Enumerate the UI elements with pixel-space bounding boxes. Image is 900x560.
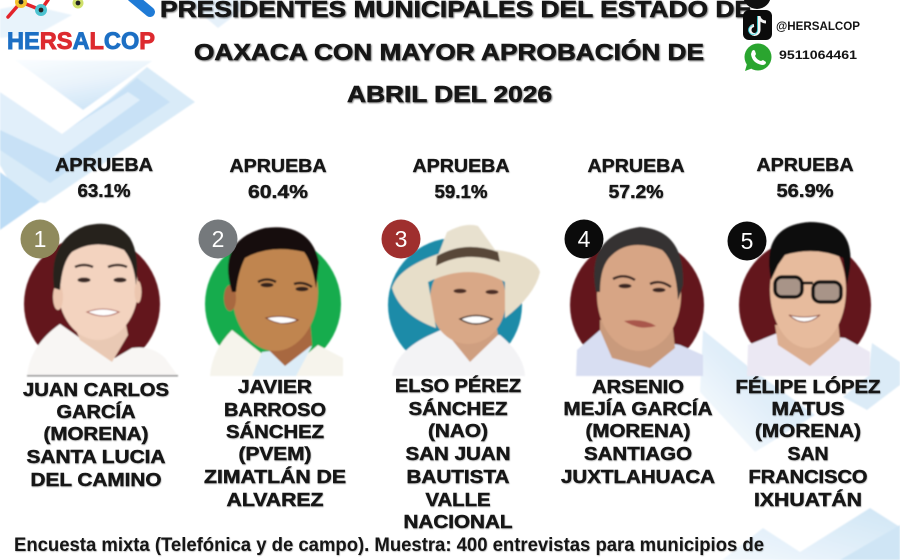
name 2: ZIMATLÁN DE [204, 466, 346, 487]
rank badge 3: 3 [395, 226, 407, 252]
rank badge 2 [198, 220, 238, 258]
name 5: (MORENA) [755, 421, 861, 441]
name 2 [204, 377, 346, 510]
approval 2: 60.4% [248, 182, 308, 202]
name 4: ARSENIO [592, 377, 684, 397]
name 2: BARROSO [224, 400, 326, 420]
name 1: DEL CAMINO [30, 470, 162, 490]
social contacts [743, 0, 860, 71]
name 2: (PVEM) [238, 444, 312, 464]
portrait 2 [205, 227, 343, 376]
portrait 4 [570, 227, 704, 376]
approval 3: APRUEBA [412, 156, 510, 176]
rank badge 4: 4 [578, 226, 591, 252]
name 1 [23, 380, 169, 490]
approval 1: APRUEBA [55, 155, 153, 175]
approval 5 [756, 155, 854, 201]
name 4 [561, 377, 715, 487]
approval 3: 59.1% [434, 182, 488, 202]
name 1: SANTA LUCIA [26, 447, 166, 467]
handle: @HERSALCOP [776, 21, 860, 33]
name 5: SAN [788, 444, 828, 464]
approval 2 [230, 156, 326, 202]
rank badge 3 [382, 220, 420, 258]
title: ABRIL DEL 2026 [347, 81, 552, 107]
logo graphic [8, 0, 150, 17]
survey footnote: Encuesta mixta (Telefónica y de campo). Muestra: 400 entrevistas para municipios de [14, 535, 764, 556]
name 3: BAUTISTA [406, 467, 510, 487]
name 3: SAN JUAN [406, 444, 510, 464]
approval 3 [412, 156, 510, 202]
approval 5: 56.9% [776, 181, 834, 201]
approval 5: APRUEBA [756, 155, 854, 175]
name 1: JUAN CARLOS [23, 380, 169, 400]
name 5: FRANCISCO [748, 467, 868, 487]
rank badge 4 [564, 220, 604, 258]
name 3: ELSO PÉREZ [395, 375, 521, 396]
icon: X [743, 0, 771, 9]
name 2: SÁNCHEZ [226, 421, 324, 442]
name 3: (NAO) [428, 421, 488, 441]
icon: tiktok [743, 10, 772, 40]
rank badge 2: 2 [212, 226, 224, 252]
phone: 9511064461 [779, 48, 857, 62]
name 4: JUXTLAHUACA [561, 467, 715, 487]
name 1: GARCÍA [56, 401, 136, 422]
name 5 [736, 376, 881, 510]
rank badge 5 [728, 222, 766, 260]
title [160, 0, 752, 107]
name 1: (MORENA) [44, 424, 148, 444]
logo wordmark: HERSALCOP [7, 28, 155, 55]
portrait 1 [24, 224, 178, 376]
approval 4: 57.2% [608, 182, 664, 202]
name 5: FÉLIPE LÓPEZ [736, 376, 881, 397]
rank badge 5: 5 [741, 228, 753, 254]
approval 1: 63.1% [78, 181, 130, 201]
name 3: NACIONAL [404, 512, 512, 532]
name 3 [395, 375, 521, 532]
name 5: MATUS [772, 399, 844, 419]
approval 4 [588, 156, 684, 202]
portrait 5 [739, 222, 871, 376]
name 3: VALLE [426, 490, 490, 510]
title: OAXACA CON MAYOR APROBACIÓN DE [194, 38, 704, 65]
name 2: JAVIER [238, 377, 312, 397]
name 5: IXHUATÁN [754, 489, 862, 510]
logo: Hersalcop [7, 0, 155, 55]
approval 1 [55, 155, 153, 201]
approval 2: APRUEBA [230, 156, 326, 176]
name 3: SÁNCHEZ [408, 398, 508, 419]
icon: whatsapp [744, 44, 772, 71]
name 4: SANTIAGO [584, 444, 692, 464]
name 2: ALVAREZ [226, 490, 324, 510]
approval 4: APRUEBA [588, 156, 684, 176]
name 4: (MORENA) [586, 421, 690, 441]
portrait 3 [388, 225, 540, 376]
rank badge 1: 1 [34, 226, 46, 252]
name 4: MEJÍA GARCÍA [564, 398, 712, 419]
rank badge 1 [20, 220, 60, 258]
